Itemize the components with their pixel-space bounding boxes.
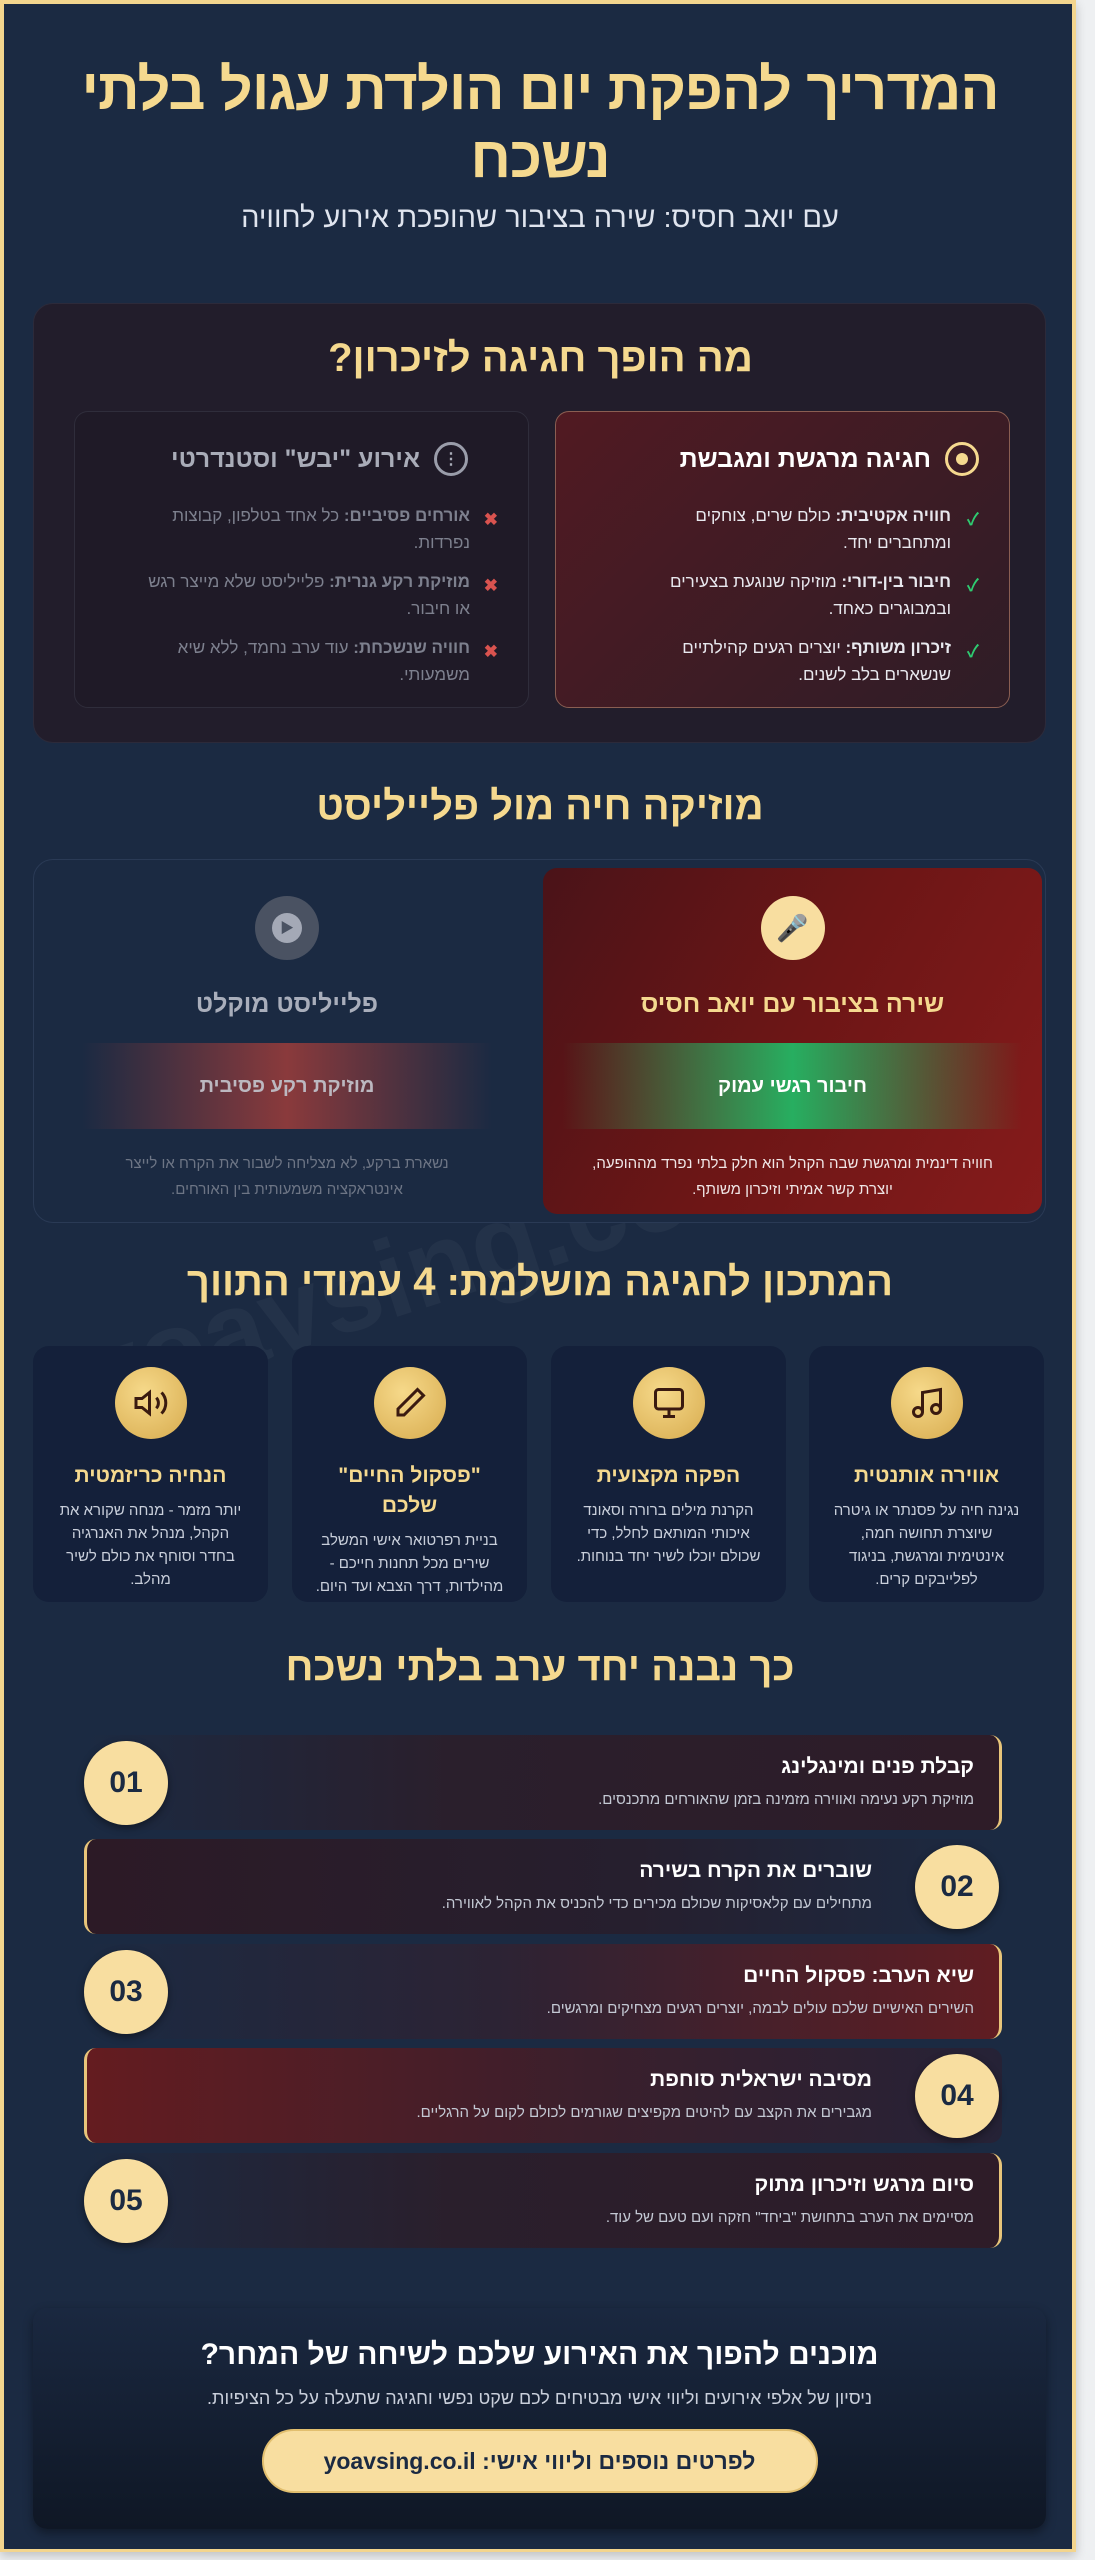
list: negatives	[148, 506, 498, 684]
list: positives: ✓	[967, 642, 979, 661]
card heading with icon: ⋮	[443, 451, 459, 468]
panel: live vs playlist	[33, 859, 1046, 1223]
heading: live vs playlist: מוזיקה חיה מול פלייליסט	[316, 784, 764, 828]
timeline: 01	[109, 1766, 143, 1799]
card: professional production	[551, 1346, 786, 1602]
cta text: ניסיון של אלפי אירועים וליווי אישי מבטיחים לכם שקט נפשי וחגיגה שתעלה על כל הציפיות.	[207, 2388, 872, 2408]
list: positives: זיכרון משותף: יוצרים רגעים קהילתיים שנשארים בלב לשנים.	[682, 638, 951, 684]
title: המדריך להפקת יום הולדת עגול בלתי נשכח	[81, 57, 999, 190]
card heading with icon: אירוע "יבש" וסטנדרטי	[171, 444, 420, 472]
list: positives: חיבור בין-דורי: מוזיקה שנוגעת בצעירים ובמבוגרים כאחד.	[670, 572, 951, 618]
cta heading: מוכנים להפוך את האירוע שלכם לשיחה של המחר?	[201, 2338, 878, 2371]
card: authentic atmosphere	[809, 1346, 1044, 1602]
card: life soundtrack: "פסקול החיים"	[338, 1464, 481, 1487]
list: negatives: מוזיקת רקע גנרית: פלייליסט שלא מייצר רגש או חיבור.	[148, 572, 470, 618]
card: charismatic leading: יותר מזמר - מנחה שקורא את הקהל, מנהל את האנרגיה בחדר וסוחף את כולם לשיר מהלב.	[60, 1502, 241, 1588]
card: exciting celebration	[555, 411, 1010, 708]
description: אינטראקציה משמעותית בין האורחים.	[171, 1181, 403, 1198]
step 05: סיום מרגש וזיכרון מתוק	[754, 2173, 974, 2196]
step 02	[84, 1839, 1002, 1934]
bar: passive background music: מוזיקת רקע פסיבית	[200, 1074, 374, 1096]
card: professional production: הקרנת מילים ברורה וסאונד איכותי המותאם לחלל, כדי שכולם יוכלו לשיר יחד בנוחות.	[577, 1502, 760, 1565]
icon: pencil	[374, 1367, 446, 1439]
icon: monitor	[632, 1367, 704, 1439]
timeline: 05	[109, 2184, 143, 2217]
card heading with icon	[171, 442, 468, 476]
watermark: yoavsing.co.il	[63, 1097, 793, 1438]
card: dry event	[74, 411, 529, 708]
list: positives: חוויה אקטיבית: כולם שרים, צוחקים ומתחברים יחד.	[695, 506, 951, 552]
card title: פלייליסט מוקלט	[196, 990, 378, 1018]
card heading with icon: חגיגה מרגשת ומגבשת	[680, 444, 931, 472]
card: charismatic leading: הנחיה כריזמטית	[75, 1464, 226, 1487]
button: לפרטים נוספים וליווי אישי: yoavsing.co.il	[324, 2448, 755, 2474]
description: נשארת ברקע, לא מצליחה לשבור את הקרח או לייצר	[125, 1155, 449, 1172]
card heading with icon	[680, 442, 979, 476]
timeline: 03	[109, 1975, 143, 2008]
icon: singer: 🎤	[776, 912, 809, 942]
bar: deep emotional connection: חיבור רגשי עמוק	[718, 1074, 867, 1096]
bar: passive background music	[82, 1043, 492, 1129]
panel: call to action	[33, 2308, 1046, 2529]
card: charismatic leading	[33, 1346, 268, 1602]
step 04: מגבירים את הקצב עם להיטים מקפיצים שגורמים לכולם לקום על הרגליים.	[416, 2104, 872, 2121]
step 03: שיא הערב: פסקול החיים	[743, 1964, 974, 1987]
description	[125, 1155, 449, 1198]
icon: music note	[890, 1367, 962, 1439]
list: positives	[670, 506, 979, 684]
card: life soundtrack	[292, 1346, 527, 1602]
step 04: מסיבה ישראלית סוחפת	[650, 2068, 872, 2091]
list: negatives: ✖	[484, 576, 498, 595]
list: negatives: חוויה שנשכחת: עוד ערב נחמד, ללא שיא משמעותי.	[178, 638, 470, 684]
list: positives: ✓	[967, 576, 979, 595]
panel: what makes a celebration memorable	[33, 303, 1046, 743]
step 01: מוזיקת רקע נעימה ואווירה מזמינה בזמן שהאורחים מתכנסים.	[598, 1791, 974, 1808]
step 05: מסיימים את הערב בתחושת "ביחד" חזקה ועם טעם של עוד.	[606, 2209, 974, 2226]
step 05	[84, 2153, 1002, 2248]
description: חוויה דינמית ומרגשת שבה הקהל הוא חלק בלתי נפרד מההופעה,	[592, 1155, 993, 1172]
description	[592, 1155, 993, 1198]
card: life soundtrack: בניית רפרטואר אישי המשלב שירים מכל תחנות חייכם - מהילדות, דרך הצבא ועד היום.	[316, 1532, 503, 1595]
step 02: מתחילים עם קלאסיקות שכולם מכירים כדי להכניס את הקהל לאווירה.	[442, 1895, 872, 1912]
list: negatives: ✖	[484, 510, 498, 529]
card title: שירה בציבור עם יואב חסיס	[641, 990, 944, 1018]
list: positives: ✓	[967, 510, 979, 529]
heading: מה הופך חגיגה לזיכרון?	[328, 336, 753, 380]
card: live singing	[543, 868, 1042, 1214]
step 02: שוברים את הקרח בשירה	[639, 1859, 872, 1882]
step 03	[84, 1944, 1002, 2039]
list: negatives: אורחים פסיביים: כל אחד בטלפון, קבוצות נפרדות.	[172, 506, 470, 552]
icon: play	[255, 896, 319, 960]
card: professional production: הפקה מקצועית	[597, 1464, 740, 1487]
timeline: 04	[940, 2079, 974, 2112]
card: recorded playlist	[98, 896, 477, 1198]
list: negatives: ✖	[484, 642, 498, 661]
card: authentic atmosphere: נגינה חיה על פסנתר או גיטרה שיוצרת תחושה חמה, אינטימית ומרגשת, בניגוד לפלייבקים קרים.	[834, 1502, 1019, 1588]
icon: play: ▶	[280, 920, 294, 936]
button	[262, 2429, 818, 2493]
icon: singer	[760, 896, 824, 960]
heading: timeline: כך נבנה יחד ערב בלתי נשכח	[285, 1645, 795, 1689]
timeline: 02	[940, 1870, 974, 1903]
card: authentic atmosphere: אווירה אותנטית	[854, 1464, 999, 1487]
step 04	[84, 2048, 1002, 2143]
icon: speaker	[114, 1367, 186, 1439]
description: יוצרת קשר אמיתי וזיכרון משותף.	[692, 1181, 893, 1198]
card: life soundtrack: שלכם	[382, 1494, 437, 1517]
bar: deep emotional connection	[563, 1043, 1022, 1129]
step 01	[84, 1735, 1002, 1830]
subtitle: עם יואב חסיס: שירה בציבור שהופכת אירוע לחוויה	[241, 202, 839, 234]
step 01: קבלת פנים ומינגלינג	[781, 1755, 974, 1778]
heading: 4 pillars: המתכון לחגיגה מושלמת: 4 עמודי התווך	[187, 1260, 893, 1304]
step 03: השירים האישיים שלכם עולים לבמה, יוצרים רגעים מצחיקים ומרגשים.	[547, 2000, 974, 2017]
